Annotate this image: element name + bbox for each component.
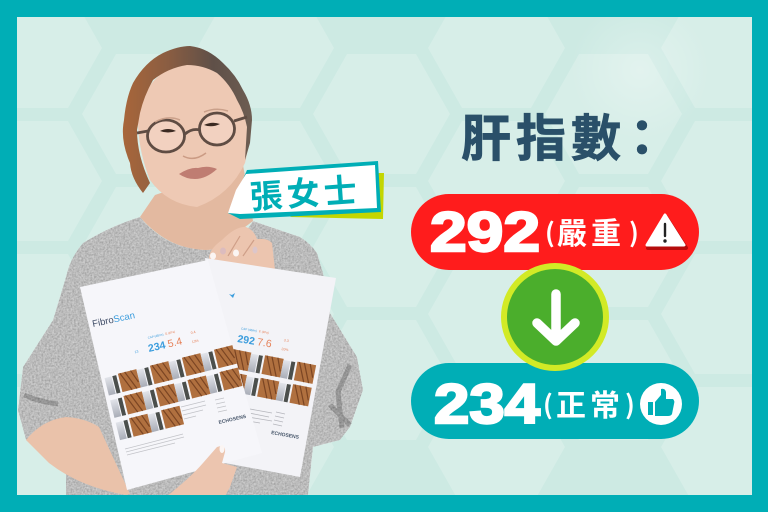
title: 肝指數 <box>461 99 626 171</box>
front report values: 13% <box>191 339 199 344</box>
title: ： <box>617 99 667 171</box>
mouth <box>179 167 217 179</box>
eyes <box>160 123 220 132</box>
front report conditions <box>125 398 227 455</box>
back report ultrasound tiles <box>211 346 316 406</box>
front report values: 5.4 <box>166 335 184 350</box>
back report values: 292 <box>237 333 256 348</box>
normal label: ) <box>625 385 635 422</box>
value 292: 292 <box>430 200 540 263</box>
face <box>138 64 250 207</box>
icon: down arrow <box>537 294 575 341</box>
back report values: 7.6 <box>256 336 273 350</box>
back report values: 20% <box>281 347 289 352</box>
person holding reports <box>18 46 363 496</box>
right hand fingers <box>209 227 275 270</box>
tag name: 張女士 <box>248 163 362 219</box>
glasses <box>137 113 247 152</box>
back report values: 3.3 <box>284 338 289 343</box>
severe pill <box>411 194 699 270</box>
lower hand <box>167 445 237 496</box>
back report logo: ECHOSENS <box>271 430 300 441</box>
normal pill <box>411 363 699 439</box>
neck <box>140 165 253 252</box>
arrow badge <box>504 266 606 368</box>
nose <box>183 153 206 158</box>
normal label: ( <box>543 385 553 422</box>
front report logo: ECHOSENS <box>218 414 247 426</box>
tag shadow <box>290 173 384 219</box>
normal label: 正常 <box>556 381 624 425</box>
severe label: ( <box>545 213 555 250</box>
back report values: E (kPa) <box>259 329 269 335</box>
severe label: ) <box>629 213 639 250</box>
front report values: 13 <box>134 349 139 354</box>
value 234: 234 <box>434 372 540 435</box>
name tag <box>228 161 384 219</box>
sweater folds <box>24 365 350 428</box>
back report mark <box>229 293 235 298</box>
back report values: CAP (dB/m) <box>241 327 257 333</box>
hair <box>123 46 252 193</box>
eyebrows <box>155 109 228 122</box>
front report values: 0.4 <box>190 330 196 335</box>
severe label: 嚴重 <box>557 209 625 253</box>
back report conditions <box>248 409 285 426</box>
front report values <box>132 325 199 358</box>
front report values: CAP (dB/m) <box>147 332 164 340</box>
FibroScan logo: FibroScan <box>91 310 136 330</box>
front report <box>80 260 262 490</box>
icon: thumbs up <box>640 383 682 425</box>
front report values: E (kPa) <box>165 330 176 336</box>
front report ultrasound tiles <box>104 345 248 440</box>
icon: warning <box>647 215 686 248</box>
tag box <box>228 161 381 219</box>
back report values <box>237 326 291 353</box>
tag inner <box>228 165 377 214</box>
back report <box>205 258 336 477</box>
sweater <box>18 217 363 495</box>
front report values: 234 <box>147 339 167 355</box>
background glow <box>570 0 710 140</box>
left forearm <box>26 417 130 495</box>
